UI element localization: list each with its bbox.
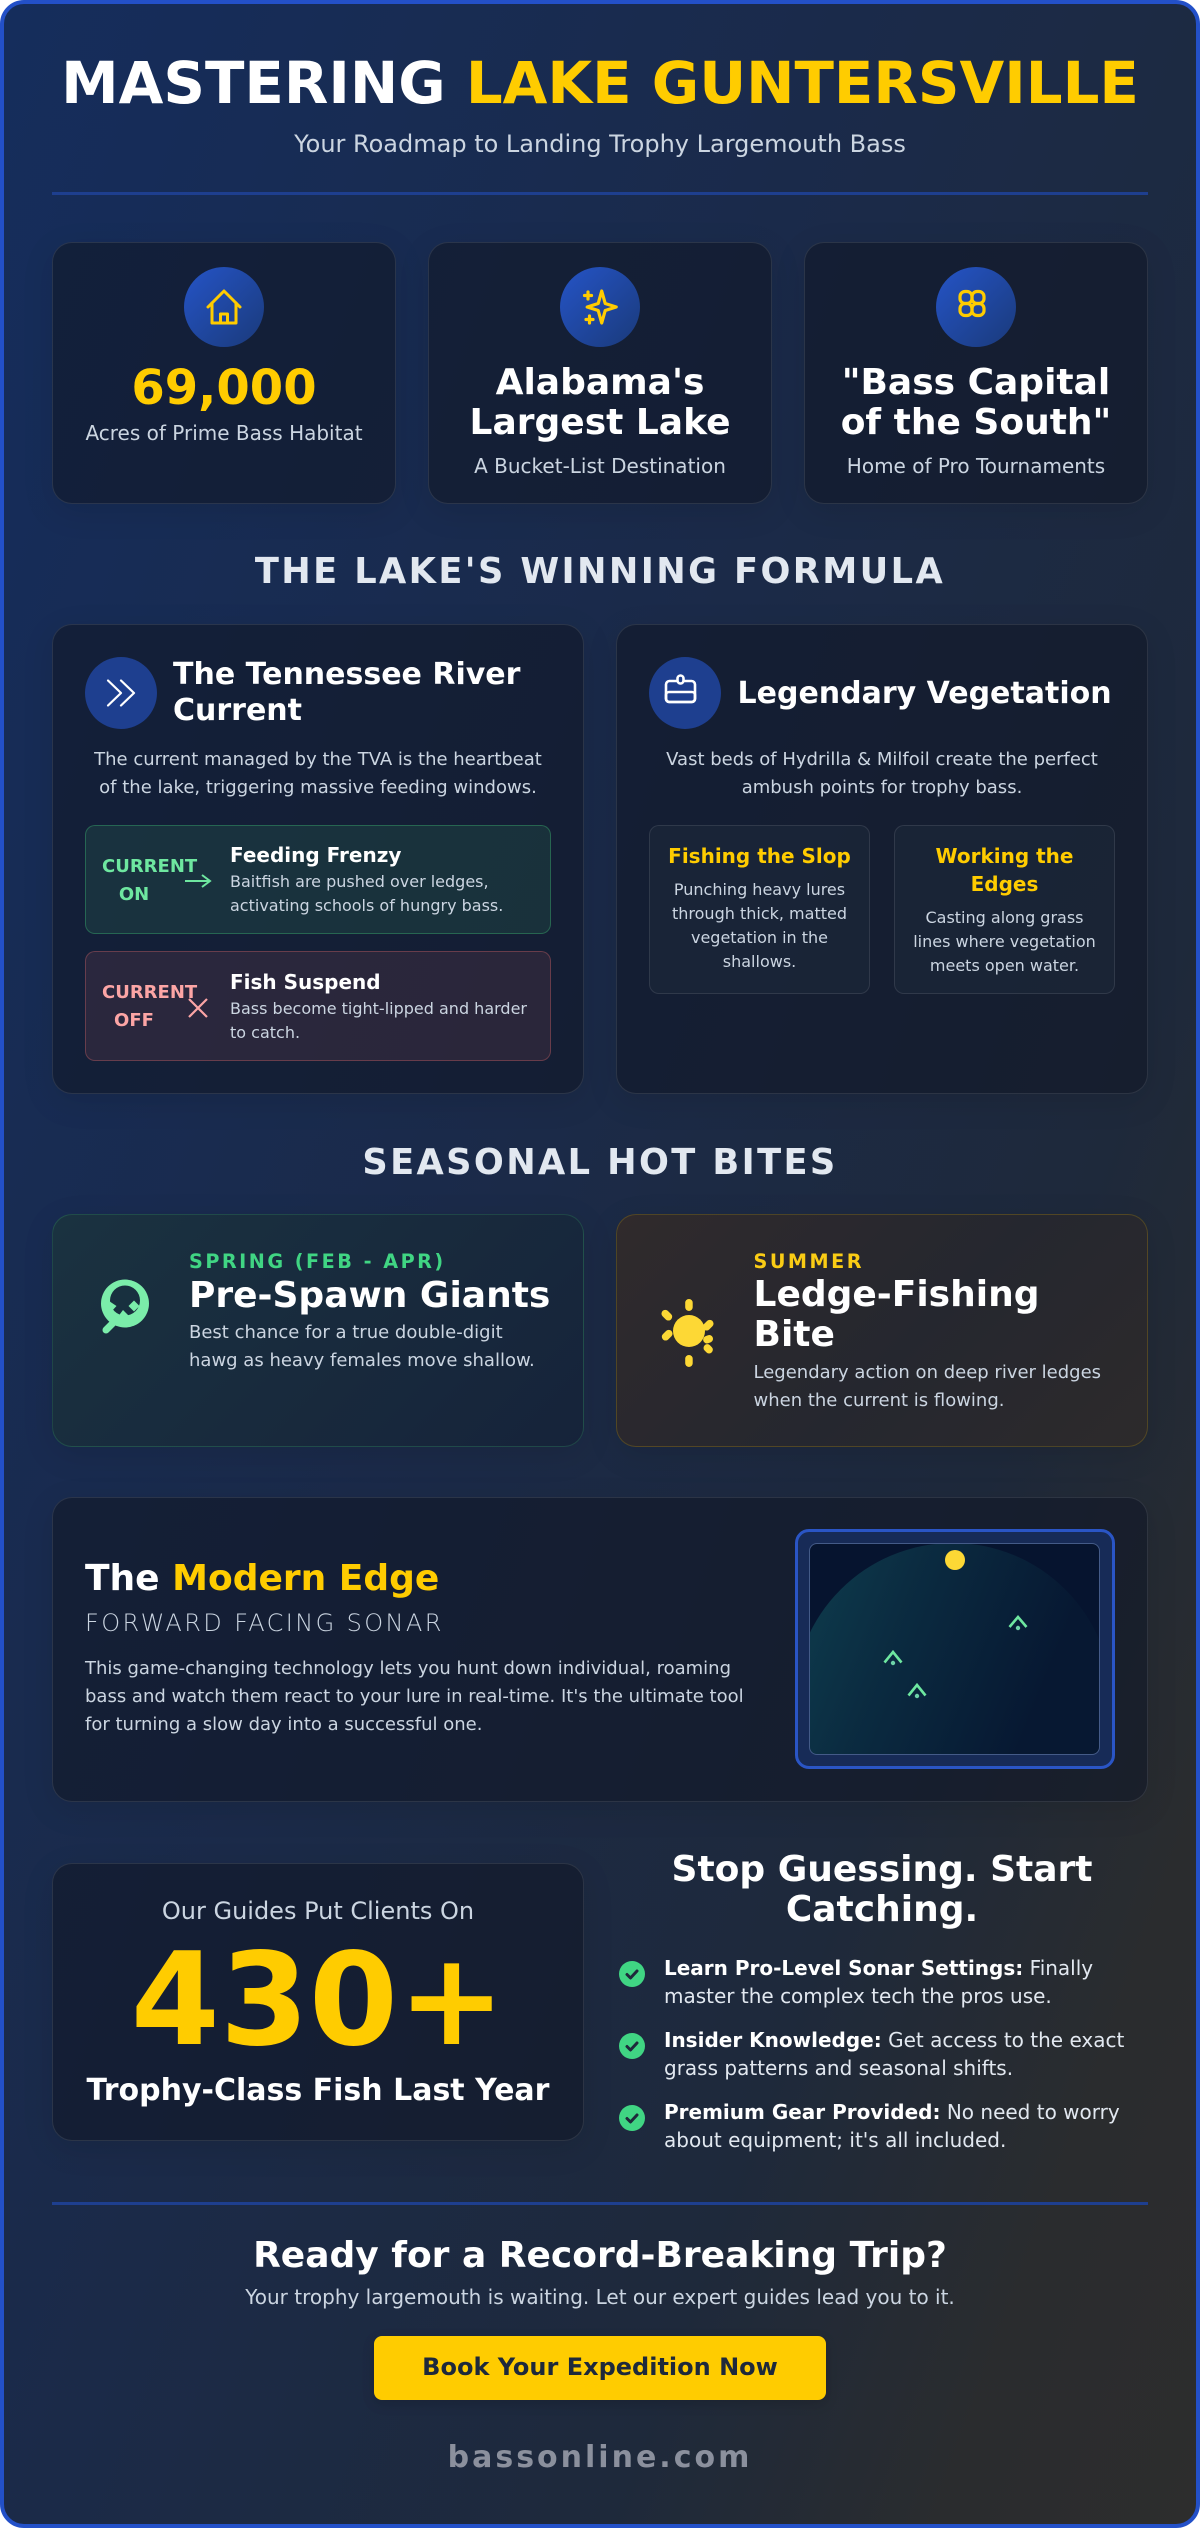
season text [754,1362,1101,1411]
card text: vegetation in the [691,928,828,947]
benefit text: Learn Pro-Level Sonar Settings: Finally [664,1956,1093,1980]
panel description: of the lake, triggering massive feeding windows. [99,777,537,798]
stat heading [470,362,730,443]
season text: Best chance for a true double-digit [189,1322,503,1343]
sonar graphic [795,1529,1115,1769]
season text: when the current is flowing. [754,1390,1004,1411]
season heading [754,1274,1039,1355]
panel text [84,1658,744,1735]
call to action heading: Ready for a Record-Breaking Trip? [253,2235,947,2276]
callout text: Baitfish are pushed over ledges, [230,872,489,891]
icon: spring lure [101,1280,149,1334]
season text [189,1322,535,1371]
card text [913,908,1096,975]
current off label: CURRENT [102,982,197,1003]
subtitle: Your Roadmap to Landing Trophy Largemouth Bass [294,130,906,158]
callout text: activating schools of hungry bass. [230,896,503,915]
stat heading [841,362,1111,443]
callout: current off [85,951,551,1061]
card text: Punching heavy lures [674,880,845,899]
big number: 430+ [131,1926,505,2075]
panel heading: Current [173,693,302,728]
title: MASTERING LAKE GUNTERSVILLE [61,48,1139,116]
stat label: Home of Pro Tournaments [847,454,1105,478]
panel: bass capital [804,242,1148,504]
button: Book Your Expedition Now [422,2353,778,2381]
benefit list [619,1956,1124,2152]
card title: Fishing the Slop [668,844,851,868]
stat label: A Bucket-List Destination [474,454,726,478]
season label: SUMMER [754,1250,864,1273]
panel: largest lake [428,242,772,504]
card text: shallows. [723,952,796,971]
panel description: Vast beds of Hydrilla & Milfoil create the perfect [666,749,1098,770]
button [374,2336,826,2400]
callout title: Feeding Frenzy [230,843,401,867]
panel subheading: FORWARD FACING SONAR [85,1609,444,1637]
website: bassonline.com [448,2440,752,2475]
heading: stop guessing: Stop Guessing. Start [672,1849,1092,1890]
current on label: CURRENT [102,856,197,877]
stat heading: of the South" [841,402,1111,443]
card text: meets open water. [930,956,1079,975]
panel text: for turning a slow day into a successful one. [85,1714,482,1735]
heading: stop guessing: Catching. [786,1889,978,1930]
card title: Working the [936,844,1074,868]
benefit text: about equipment; it's all included. [664,2128,1006,2152]
stat number: 69,000 [131,360,317,416]
panel heading: The Modern Edge [85,1558,439,1599]
benefit text [664,2100,1120,2152]
panel heading: Legendary Vegetation [738,676,1112,711]
stat caption: Trophy-Class Fish Last Year [87,2073,549,2108]
panel description: The current managed by the TVA is the heartbeat [94,749,542,770]
section heading: winning formula: THE LAKE'S WINNING FORMULA [255,551,945,592]
panel: 69,000 acres [52,242,396,504]
callout: current on [85,825,551,934]
stat heading: "Bass Capital [842,362,1110,403]
benefit text: master the complex tech the pros use. [664,1984,1052,2008]
benefit: premium gear [619,2100,1120,2152]
icon: clover squares [936,267,1016,347]
callout text [230,872,503,915]
sonar screen [809,1543,1100,1755]
icon: home [184,267,264,347]
panel description [666,749,1098,798]
sonar cone [794,1543,1112,1861]
season text: Legendary action on deep river ledges [754,1362,1101,1383]
season text: hawg as heavy females move shallow. [189,1350,535,1371]
card title [936,844,1074,896]
fish markers [884,1615,1028,1698]
section heading: seasonal hot bites: SEASONAL HOT BITES [362,1142,838,1183]
benefit text [664,1956,1093,2008]
panel: summer [616,1214,1148,1447]
card title: Edges [971,872,1038,896]
benefit text: grass patterns and seasonal shifts. [664,2056,1013,2080]
icon: check [619,2105,645,2131]
card: working the edges [894,825,1115,994]
card text: Casting along grass [925,908,1084,927]
panel description [94,749,542,798]
current off label [102,982,198,1031]
card text: lines where vegetation [913,932,1096,951]
heading: stop guessing [672,1849,1092,1930]
stat intro: Our Guides Put Clients On [162,1897,474,1925]
call to action text: Your trophy largemouth is waiting. Let our expert guides lead you to it. [245,2285,955,2309]
season heading: Pre-Spawn Giants [189,1275,550,1316]
current off label: OFF [114,1010,154,1031]
icon: cross [188,998,208,1018]
benefit: insider knowledge [619,2028,1124,2080]
stat heading: Alabama's [496,362,704,403]
callout text: Bass become tight-lipped and harder [230,999,527,1018]
card text: through thick, matted [672,904,847,923]
panel: legendary vegetation [616,624,1148,1094]
panel text: bass and watch them react to your lure in real-time. It's the ultimate tool [85,1686,744,1707]
panel: Tennessee River current [52,624,584,1094]
current on label: ON [119,884,149,905]
season heading: Bite [754,1314,835,1355]
benefit: sonar settings [619,1956,1093,2008]
benefit text: Insider Knowledge: Get access to the exact [664,2028,1124,2052]
panel: spring [52,1214,584,1447]
season label: SPRING (FEB - APR) [189,1250,446,1273]
icon: arrow [185,874,212,888]
card text [672,880,847,971]
callout text [230,999,527,1042]
panel text: This game-changing technology lets you hunt down individual, roaming [85,1658,731,1679]
callout text: to catch. [230,1023,300,1042]
panel heading [173,657,520,728]
icon: check [619,1961,645,1987]
season heading: Ledge-Fishing [754,1274,1039,1315]
sonar transducer [945,1550,965,1570]
panel heading: The Tennessee River [173,657,520,692]
card: fishing the slop [649,825,870,994]
icon: sun [662,1299,714,1367]
panel description: ambush points for trophy bass. [742,777,1022,798]
benefit text [664,2028,1124,2080]
stat heading: Largest Lake [470,402,730,443]
callout title: Fish Suspend [230,970,381,994]
icon: vegetation box [649,657,721,729]
icon: sparkles [560,267,640,347]
benefit text: Premium Gear Provided: No need to worry [664,2100,1120,2124]
current on label [102,856,198,905]
icon: check [619,2033,645,2059]
icon: double chevron [85,657,157,729]
panel: 430+ stat [52,1863,584,2141]
panel: the modern edge [52,1497,1148,1802]
stat label: Acres of Prime Bass Habitat [85,421,363,445]
